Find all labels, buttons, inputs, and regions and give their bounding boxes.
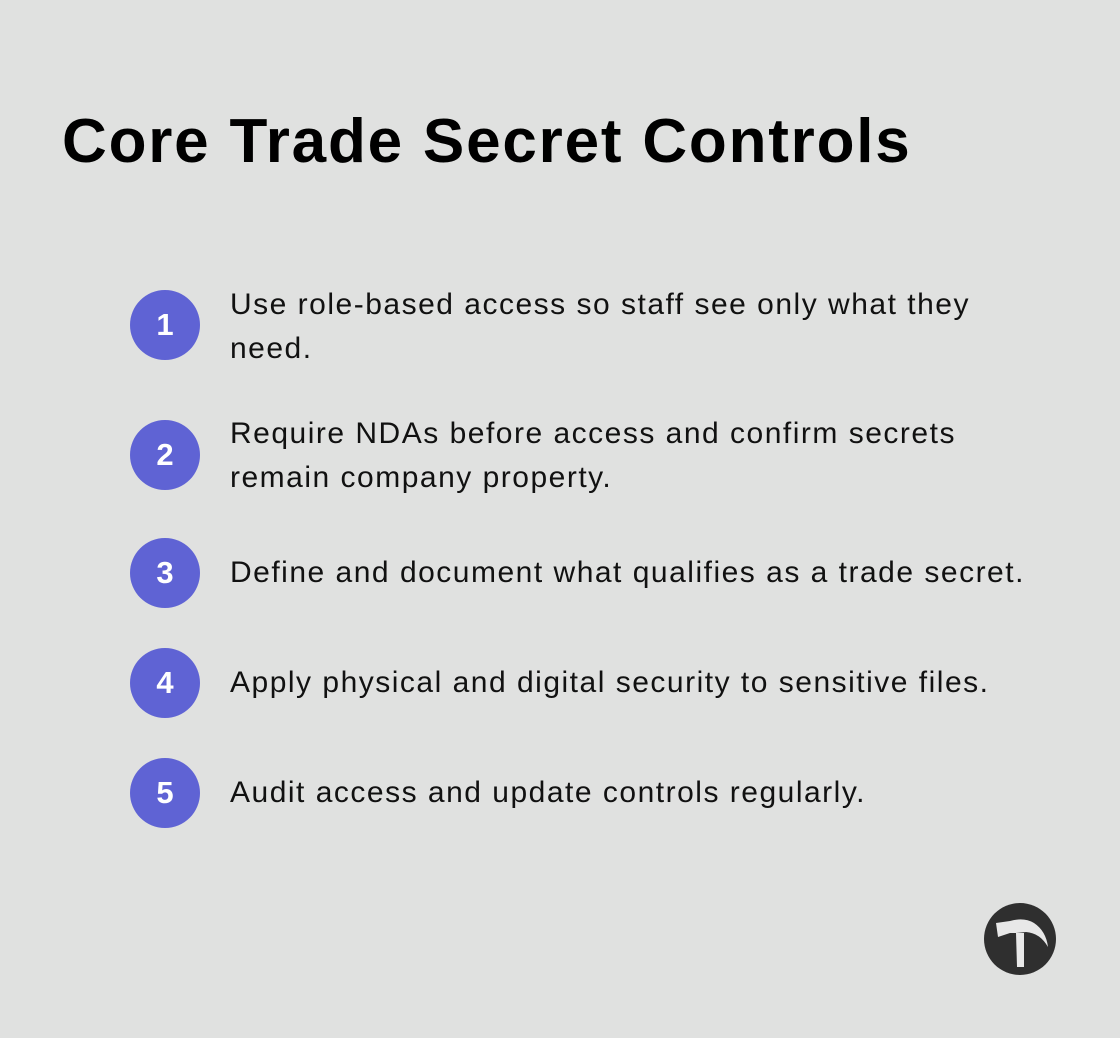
number 4	[130, 648, 200, 718]
title: Core Trade Secret Controls	[62, 107, 912, 176]
text 3: Define and document what qualifies as a trade secret.	[230, 556, 1025, 589]
item 1	[130, 288, 970, 365]
item 5	[130, 758, 866, 828]
number 2: 2	[156, 437, 174, 472]
text 5: Audit access and update controls regularly.	[230, 776, 866, 809]
number 3: 3	[156, 555, 174, 590]
number 1: 1	[156, 307, 174, 342]
text 2: Require NDAs before access and confirm secrets remain company property.	[230, 417, 956, 494]
number 5: 5	[156, 775, 174, 810]
item 3	[130, 538, 1025, 608]
number 2	[130, 420, 200, 490]
item 4	[130, 648, 990, 718]
item 2	[130, 417, 956, 494]
number 4: 4	[156, 665, 174, 700]
text 1: Use role-based access so staff see only what they need.	[230, 288, 970, 365]
text 4: Apply physical and digital security to sensitive files.	[230, 666, 990, 699]
number 3	[130, 538, 200, 608]
logo: hammer	[984, 903, 1056, 975]
number 5	[130, 758, 200, 828]
number 1	[130, 290, 200, 360]
